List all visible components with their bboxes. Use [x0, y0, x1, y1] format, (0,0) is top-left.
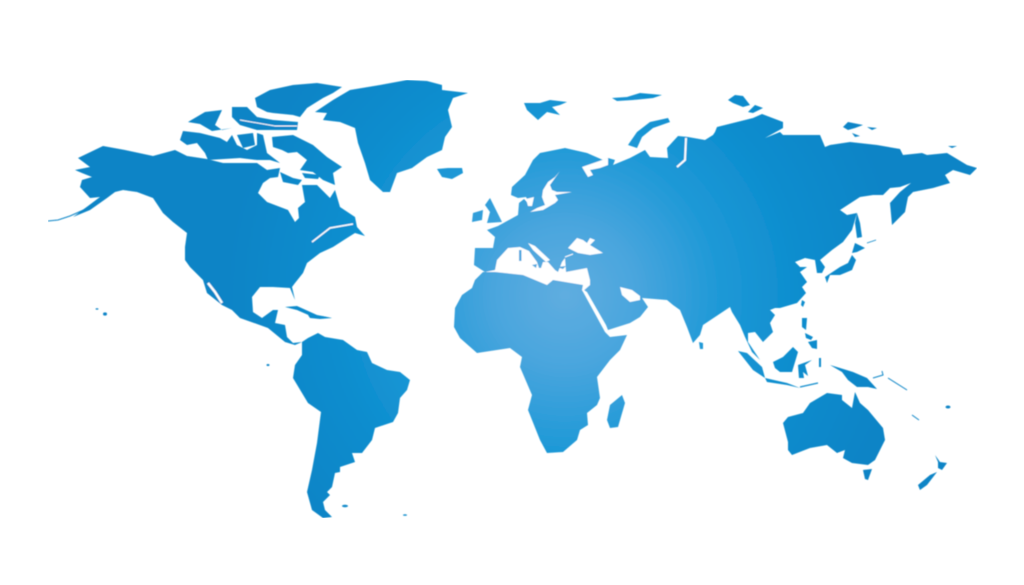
landmass: South America — [266, 333, 410, 518]
channels and gulfs of North America — [208, 120, 353, 303]
landmass: Iceland — [437, 168, 463, 179]
landmass: North America — [48, 83, 365, 345]
map artwork — [48, 80, 977, 518]
inland seas — [485, 138, 686, 302]
landmass: Madagascar — [607, 395, 625, 428]
landmass: Greenland — [315, 80, 468, 192]
landmass: Oceania — [783, 365, 950, 490]
landmass: Southeast Asia and Indonesia — [738, 318, 821, 388]
landmass: Eurasia — [474, 93, 977, 360]
landmass: Mediterranean islands, British Isles — [472, 198, 566, 269]
landmass: Africa — [454, 272, 627, 453]
landmass: East Asian islands — [699, 213, 876, 349]
